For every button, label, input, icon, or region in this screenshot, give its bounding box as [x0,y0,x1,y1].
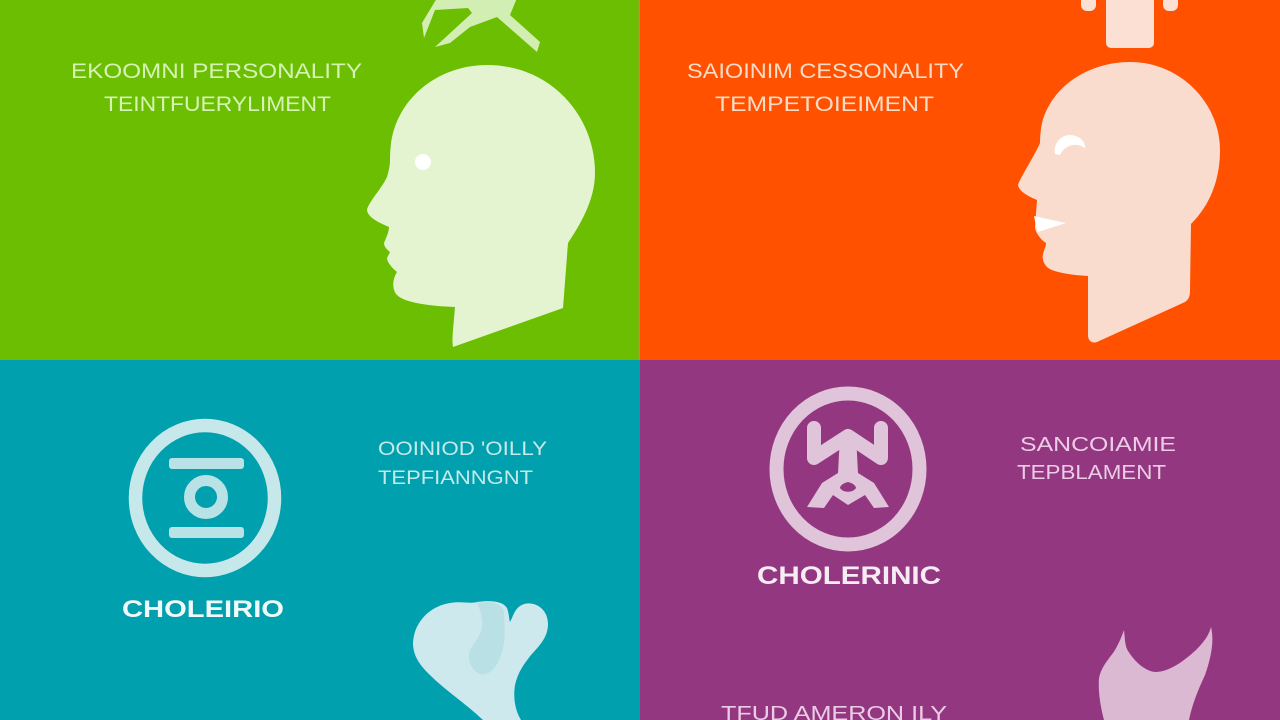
heading: green panel title [71,60,362,116]
icon: orange plug symbol [1081,0,1178,48]
panel: teal choleric quadrant [0,360,640,720]
icon: teal heart-shaped blob [413,601,548,720]
heading: purple panel title: TEPBLAMENT [1017,462,1166,484]
heading: teal panel title: OOINIOD 'OILLY [378,439,547,460]
panel: green melancholic quadrant [0,0,640,360]
heading: orange panel title: SAIOINIM CESSONALITY [687,60,964,83]
panel: orange sanguine quadrant [640,0,1280,360]
heading: green panel title: EKOOMNI PERSONALITY [71,60,362,83]
label: teal emblem name: CHOLEIRIO [122,596,284,623]
icon: green head profile [367,65,595,347]
icon: orange head profile [1018,62,1220,343]
icon: head smile mark [1034,216,1066,232]
heading: green panel title: TEINTFUERYLIMENT [104,93,331,116]
panel: purple choleric quadrant [640,360,1280,720]
icon: head highlight dot [415,154,431,170]
heading: purple panel title [1017,434,1176,484]
icon: purple ring emblem [776,394,920,544]
icon: head brow mark [1055,135,1085,155]
heading: teal panel title [378,439,547,489]
label: purple emblem name: CHOLERINIC [757,562,941,590]
icon: green crossed symbol [422,0,540,52]
heading: orange panel title [687,60,964,116]
icon: purple curved shape [1099,627,1212,720]
icon: teal ring emblem [136,426,274,570]
heading: teal panel title: TEPFIANNGNT [378,468,533,489]
heading: purple panel title: SANCOIAMIE [1020,434,1176,456]
heading: orange panel title: TEMPETOIEIMENT [715,93,934,116]
